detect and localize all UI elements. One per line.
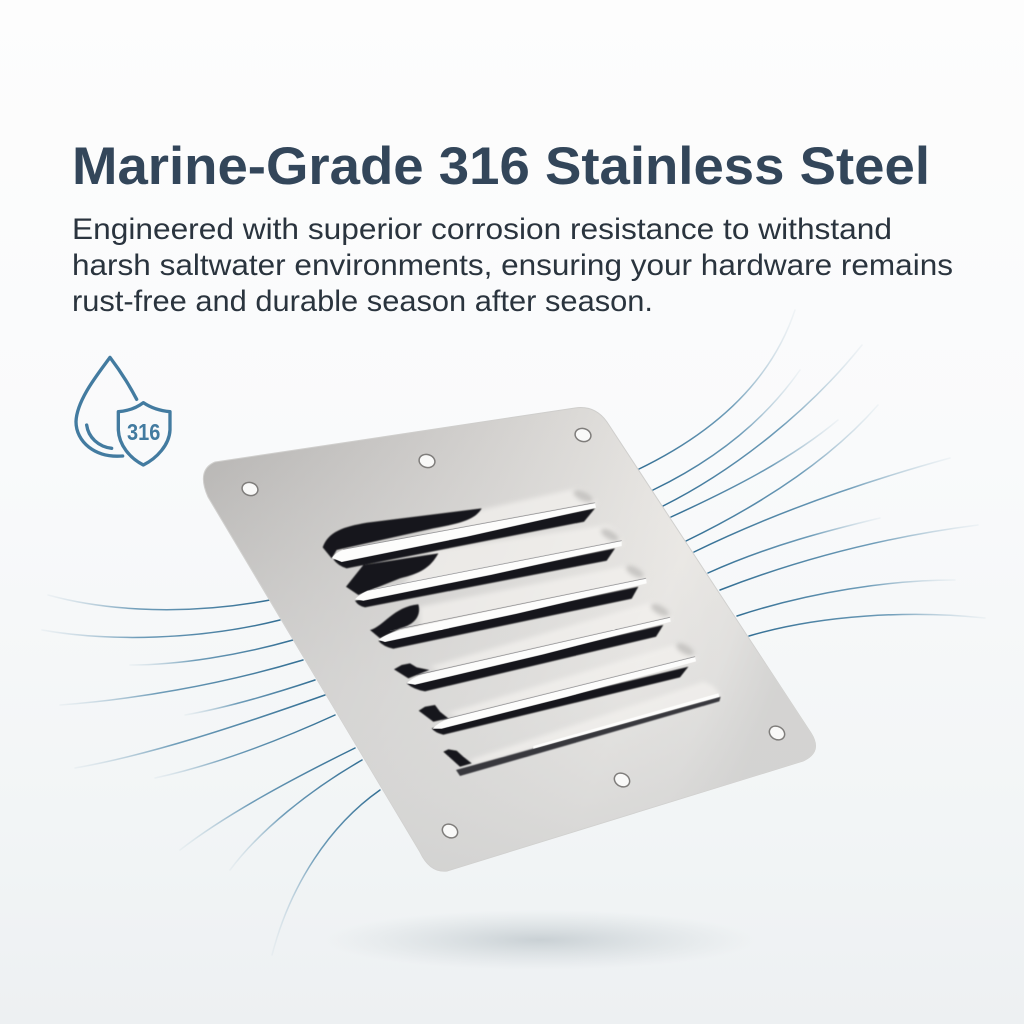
- icon: water drop with 316 shield: [76, 357, 170, 465]
- ground shadow: [325, 910, 755, 970]
- flow lines: left side: [42, 595, 380, 955]
- white stripes: [332, 503, 719, 749]
- thin edge lines: [343, 503, 695, 720]
- louvers: [323, 487, 721, 776]
- description text: harsh saltwater environments, ensuring your hardware remains: [72, 249, 953, 282]
- flow lines: right side: [637, 310, 985, 636]
- louver end tips: [572, 487, 696, 658]
- stainless steel louver plate: [203, 408, 815, 871]
- louver raised bodies: [400, 488, 721, 765]
- dark reflections and louver shadows: [323, 508, 721, 776]
- title: Marine-Grade 316 Stainless Steel: [72, 137, 930, 196]
- mounting holes: [241, 427, 787, 841]
- icon: water drop with 316 shield: 316: [127, 419, 160, 445]
- description text: rust-free and durable season after season.: [72, 285, 653, 318]
- description text: [72, 213, 953, 318]
- description text: Engineered with superior corrosion resistance to withstand: [72, 213, 892, 246]
